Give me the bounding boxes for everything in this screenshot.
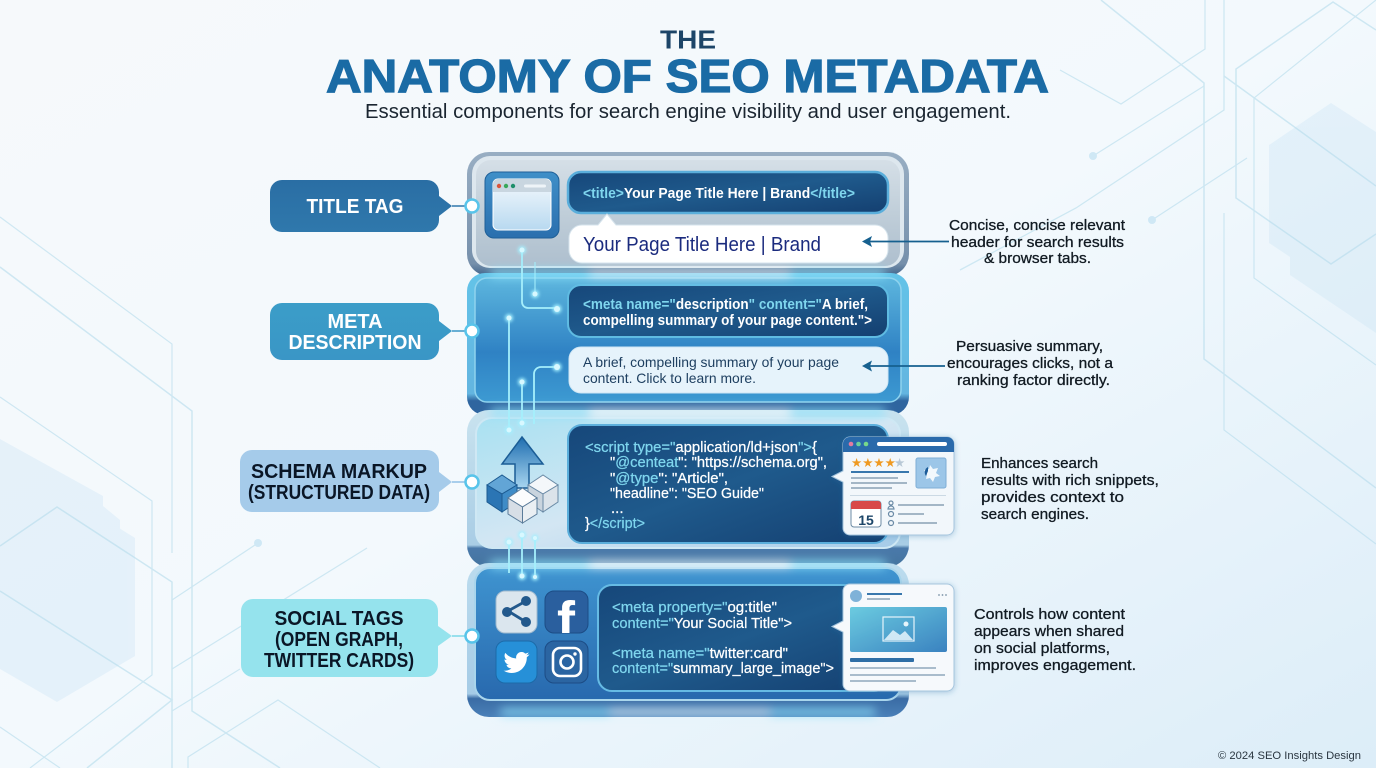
label: schema markup — [240, 450, 452, 512]
panel: title tag — [467, 152, 909, 276]
label: schema markup: (STRUCTURED DATA) — [248, 482, 430, 504]
code box: social meta tags: content="Your Social Title"> — [612, 615, 792, 632]
text: title tag description — [949, 217, 1126, 267]
connector lines — [505, 246, 562, 580]
label: meta description: DESCRIPTION — [288, 332, 422, 354]
social post preview card — [832, 584, 954, 691]
footer credit: © 2024 SEO Insights Design — [1218, 750, 1361, 762]
code box: social meta tags: <meta property="og:title" — [612, 599, 777, 616]
star rating: ★★★★ — [851, 455, 896, 470]
text: schema description: provides context to — [981, 489, 1124, 506]
search result description preview: content. Click to learn more. — [583, 370, 756, 386]
search result description preview — [569, 347, 888, 393]
icon: cubes and arrow — [487, 437, 558, 523]
icon: facebook — [545, 591, 588, 651]
connector nodes — [452, 200, 478, 642]
code box: social meta tags: <meta name="twitter:card" — [612, 645, 788, 662]
icon: twitter — [496, 641, 537, 683]
code box: schema json-ld: "@type": "Article", — [610, 470, 728, 487]
icon: browser window — [485, 172, 559, 238]
code box: title: <title>Your Page Title Here | Brand</title> — [583, 186, 855, 202]
title: main heading: ANATOMY OF SEO METADATA — [326, 50, 1049, 102]
label: meta description: META — [328, 311, 382, 333]
subtitle: Essential components for search engine visibility and user engagement. — [365, 101, 1011, 123]
panel: social tags — [467, 563, 909, 717]
code box: meta description: compelling summary of your page content."> — [583, 313, 872, 329]
label: social tags: (OPEN GRAPH, — [275, 629, 403, 651]
text: social description: Controls how content — [974, 606, 1126, 623]
text: meta description description: Persuasive summary, — [956, 338, 1103, 355]
code box: schema json-ld: "headline": "SEO Guide" — [610, 485, 764, 502]
text: social description: improves engagement. — [974, 657, 1136, 674]
label: social tags: SOCIAL TAGS — [274, 608, 404, 630]
text: social description: on social platforms, — [974, 640, 1110, 657]
text: schema description: results with rich snippets, — [981, 472, 1159, 489]
icon: instagram — [545, 641, 588, 683]
code box: schema json-ld — [568, 425, 888, 543]
code box: title — [568, 172, 888, 213]
calendar: 15 — [858, 512, 874, 528]
rich snippet card: ★ — [894, 455, 905, 470]
panel: schema markup — [467, 410, 909, 567]
text: meta description description: ranking factor directly. — [957, 372, 1110, 389]
label: social tags — [241, 599, 452, 677]
thumbnail tile — [916, 458, 946, 488]
label: title tag: TITLE TAG — [306, 196, 404, 218]
text: meta description description: encourages clicks, not a — [947, 355, 1114, 372]
text: schema description — [981, 455, 1159, 523]
text: social description: appears when shared — [974, 623, 1124, 640]
title — [326, 24, 1049, 123]
search result title preview: Your Page Title Here | Brand — [583, 234, 821, 256]
text: title tag description: Concise, concise relevant — [949, 217, 1126, 234]
text: schema description: Enhances search — [981, 455, 1098, 472]
text: meta description description — [947, 338, 1114, 389]
label: social tags: TWITTER CARDS) — [264, 650, 414, 672]
code box: meta description: <meta name="description" content="A brief, — [583, 297, 868, 313]
code box: meta description — [568, 285, 888, 337]
image placeholder — [850, 607, 947, 652]
code box: social meta tags: content="summary_large_image"> — [612, 660, 834, 677]
code box: social meta tags — [598, 585, 888, 691]
code box: schema json-ld: <script type="application/ld+json">{ — [585, 439, 817, 456]
code box: schema json-ld: "@centeat": "https://schema.org", — [610, 454, 827, 471]
code box: schema json-ld: }</script> — [585, 515, 645, 532]
glowing seams between panels — [490, 270, 886, 715]
label: schema markup: SCHEMA MARKUP — [251, 461, 427, 483]
panel: meta description — [467, 273, 909, 415]
rich snippet card — [832, 437, 954, 535]
label: title tag — [270, 180, 452, 232]
icon: facebook: f — [557, 591, 576, 651]
text: schema description: search engines. — [981, 506, 1089, 523]
title: the: THE — [660, 24, 716, 54]
search result title preview — [569, 214, 888, 263]
text: title tag description: header for search results — [951, 234, 1124, 251]
arrow: meta description — [862, 360, 945, 372]
code box: schema json-ld: ... — [611, 500, 624, 517]
arrow: title tag description — [862, 236, 949, 247]
label: meta description — [270, 303, 452, 360]
search result description preview: A brief, compelling summary of your page — [583, 354, 839, 370]
text: title tag description: & browser tabs. — [984, 250, 1091, 267]
icon: share — [496, 591, 537, 633]
text: social description — [974, 606, 1136, 674]
